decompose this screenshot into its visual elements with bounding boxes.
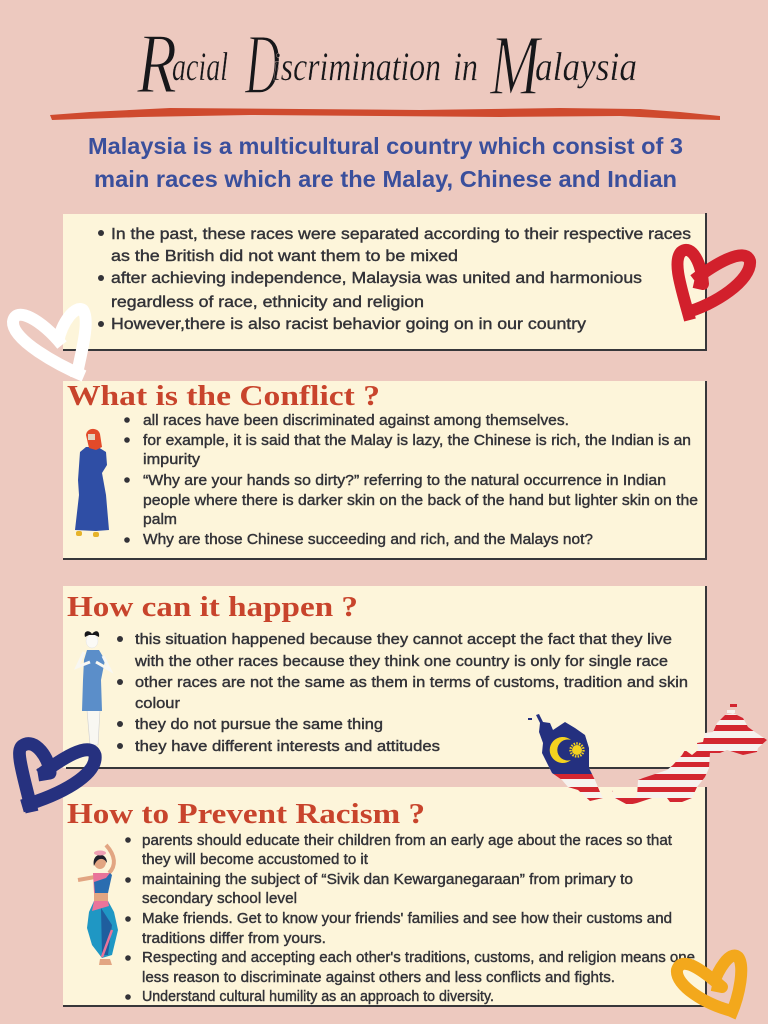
panel: how to prevent racism: Make friends. Get to know your friends' families and see how their customs and <box>142 911 672 927</box>
title <box>136 15 637 113</box>
panel: what is the conflict: “Why are your hands so dirty?” referring to the natural occurrence in Indian <box>143 473 666 489</box>
panel: introduction: In the past, these races were separated according to their respective races <box>111 226 691 243</box>
panel: how to prevent racism: secondary school level <box>142 891 297 907</box>
panel: how can it happen: How can it happen ? <box>67 591 358 623</box>
panel: what is the conflict: all races have been discriminated against among themselves. <box>143 413 569 429</box>
icon: white heart <box>13 309 86 378</box>
title: M <box>489 17 543 113</box>
panel: how can it happen: with the other races because they think one country is only for single race <box>134 653 668 670</box>
panel: how can it happen: they have different interests and attitudes <box>135 738 440 755</box>
icon: woman in blue dress and red hijab <box>75 429 109 537</box>
panel: how to prevent racism: How to Prevent Racism ? <box>67 798 425 830</box>
icon: woman in blue cheongsam <box>77 631 110 745</box>
panel: how to prevent racism: they will become accustomed to it <box>142 852 368 868</box>
title: R <box>136 15 177 111</box>
icon: Indian dancer <box>78 845 118 965</box>
panel: introduction <box>63 213 706 350</box>
panel: how can it happen <box>63 586 706 768</box>
panel: how can it happen: they do not pursue the same thing <box>135 716 383 733</box>
panel: what is the conflict <box>63 380 706 559</box>
panel: how to prevent racism: Respecting and accepting each other's traditions, customs, and religion means one <box>142 950 695 966</box>
title: D <box>244 16 280 112</box>
panel: introduction: after achieving independence, Malaysia was united and harmonious <box>111 270 642 287</box>
panel: what is the conflict: impurity <box>143 452 201 468</box>
title: iscrimination <box>272 44 441 89</box>
title: in <box>453 44 478 89</box>
title: acial <box>172 44 228 89</box>
icon: red heart <box>677 250 750 320</box>
panel: introduction: as the British did not want them to be mixed <box>111 248 458 265</box>
panel: introduction: However,there is also racist behavior going on in our country <box>111 316 586 333</box>
red brush underline <box>50 108 720 120</box>
panel: how can it happen: this situation happened because they cannot accept the fact that they live <box>135 631 672 648</box>
panel: how to prevent racism: traditions differ from yours. <box>142 931 326 947</box>
icon: Malaysia flag map <box>528 704 768 810</box>
subtitle <box>88 133 683 192</box>
panel: how can it happen: other races are not the same as them in terms of customs, tradition and skin <box>135 674 688 691</box>
panel: how to prevent racism: less reason to discriminate against others and less conflicts and fights. <box>142 970 615 986</box>
panel: how to prevent racism: parents should educate their children from an early age about the races so that <box>142 833 672 849</box>
icon: Borneo flag stripes <box>528 704 768 810</box>
title: alaysia <box>535 44 637 89</box>
icon: crescent and star <box>550 737 584 763</box>
icon: yellow heart <box>677 956 741 1017</box>
panel: what is the conflict: people where there is darker skin on the back of the hand but lighter skin on the <box>143 493 698 509</box>
subtitle: Malaysia is a multicultural country which consist of 3 <box>88 133 683 159</box>
panel: what is the conflict: Why are those Chinese succeeding and rich, and the Malays not? <box>143 532 593 548</box>
panel: how can it happen: colour <box>135 695 180 712</box>
panel: how to prevent racism: Understand cultural humility as an approach to diversity. <box>142 989 494 1005</box>
panel: what is the conflict: palm <box>143 512 177 528</box>
panel: how to prevent racism: maintaining the subject of “Sivik dan Kewarganegaraan” from primary to <box>142 872 633 888</box>
panel: what is the conflict: for example, it is said that the Malay is lazy, the Chinese is rich, the Indian is an <box>143 433 691 449</box>
icon: navy heart <box>20 744 95 812</box>
panel: what is the conflict: What is the Conflict ? <box>67 380 380 412</box>
subtitle: main races which are the Malay, Chinese and Indian <box>94 166 677 192</box>
panel: introduction: regardless of race, ethnicity and religion <box>111 294 424 311</box>
panel: how to prevent racism <box>63 787 706 1006</box>
